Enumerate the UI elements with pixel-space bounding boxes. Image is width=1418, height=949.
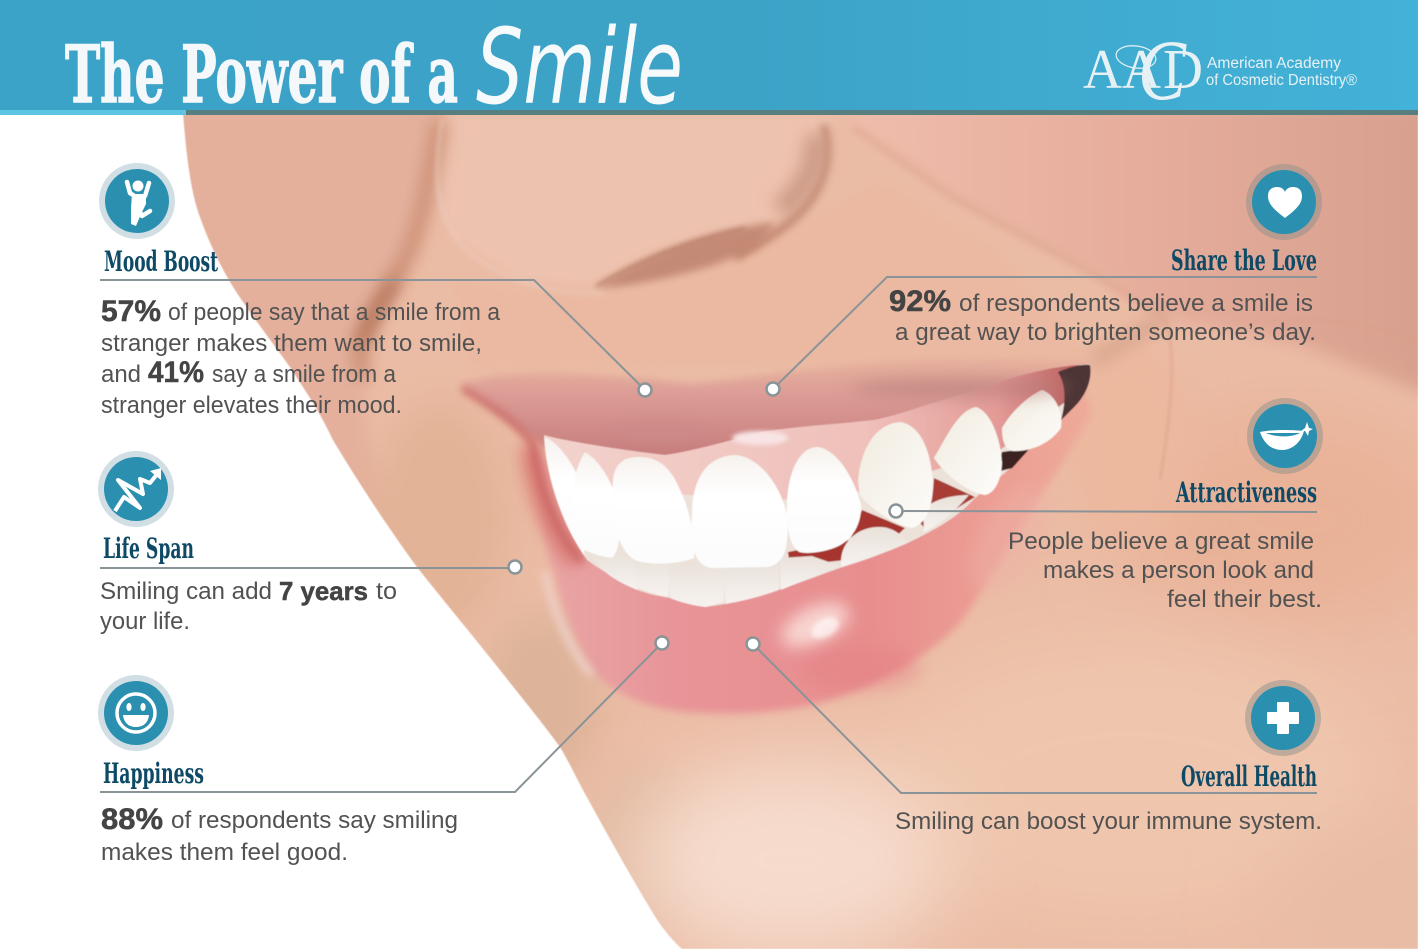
text block: of people say that a smile from a — [168, 299, 501, 326]
logo: AACD: C — [1138, 22, 1187, 118]
text block — [101, 803, 458, 866]
text block: your life. — [100, 608, 190, 635]
text block: stranger elevates their mood. — [101, 392, 402, 419]
text block: a great way to brighten someone’s day. — [895, 319, 1316, 346]
marker dots — [508, 382, 902, 650]
text block: 7 years — [279, 576, 368, 606]
gums — [544, 365, 1080, 500]
text block: of respondents believe a smile is — [959, 290, 1313, 317]
text block: makes a person look and — [1043, 557, 1314, 584]
icon: smiley — [98, 675, 174, 751]
right cheek below fold — [1158, 430, 1418, 614]
title: Smile — [476, 6, 683, 128]
cheek/nose crease — [360, 120, 440, 380]
panel: happiness — [98, 675, 458, 866]
nostril — [596, 222, 775, 288]
fold line — [856, 128, 1142, 304]
panel: mood boost — [99, 163, 501, 419]
photo: smiling face — [150, 100, 1418, 949]
heading: Share the Love — [1171, 244, 1317, 277]
icon: sparkling smile — [1247, 398, 1323, 474]
panel: life span — [98, 451, 397, 635]
logo: AACD — [1083, 22, 1358, 118]
lower teeth — [590, 495, 969, 607]
text block — [101, 295, 501, 419]
philtrum — [450, 180, 1090, 370]
heading: Mood Boost — [104, 245, 218, 278]
dark gaps — [788, 510, 905, 566]
logo: AACD: AA — [1083, 39, 1162, 101]
text block: 57% — [101, 295, 161, 328]
text block — [889, 285, 1316, 346]
text block: say a smile from a — [212, 361, 397, 388]
lower lip — [530, 380, 1092, 714]
panel: attractiveness — [1008, 398, 1323, 613]
logo: AACD: American Academy — [1207, 55, 1341, 72]
right cheek above fold — [999, 115, 1418, 394]
icon: heart — [1246, 164, 1322, 240]
text block: Smiling can boost your immune system. — [895, 808, 1322, 835]
nose wing edge — [437, 120, 605, 293]
text block: of respondents say smiling — [171, 807, 458, 834]
lower lip pale edge — [545, 572, 592, 675]
text block: People believe a great smile — [1008, 528, 1314, 555]
icon: plus — [1245, 680, 1321, 756]
skin — [150, 100, 1418, 949]
left cheek — [183, 115, 433, 494]
upper teeth — [544, 437, 861, 568]
text block: 41% — [148, 356, 204, 389]
dark back of mouth — [1058, 365, 1090, 420]
text block: 88% — [101, 803, 163, 836]
nose — [443, 120, 824, 280]
canine and side teeth — [858, 390, 1061, 528]
heading: Overall Health — [1181, 760, 1317, 793]
nose wing shadow — [735, 125, 827, 258]
mouth interior — [544, 364, 1090, 607]
icon: jumping person — [99, 163, 175, 239]
heading: Happiness — [103, 757, 204, 790]
title: The Power of a — [65, 28, 458, 121]
text block — [1008, 528, 1322, 613]
panel: overall health — [895, 680, 1322, 835]
leader lines — [100, 277, 1317, 793]
text block: makes them feel good. — [101, 839, 348, 866]
logo: AACD: of Cosmetic Dentistry® — [1206, 72, 1358, 89]
text block: and — [101, 361, 141, 388]
heading: Attractiveness — [1175, 476, 1317, 509]
heading: Life Span — [103, 532, 194, 565]
tooth highlights and lip gloss — [610, 378, 1070, 690]
upper lip — [462, 358, 1092, 470]
text block: 92% — [889, 285, 951, 318]
text block — [100, 576, 397, 635]
mouth corner shadow — [462, 388, 582, 562]
icon: rising pulse arrow — [98, 451, 174, 527]
logo: AACD: D — [1163, 39, 1203, 101]
text block: feel their best. — [1167, 586, 1322, 613]
mouth corner shade — [1092, 318, 1165, 362]
text block: to — [376, 578, 397, 605]
panel: share the love — [889, 164, 1322, 346]
text block: stranger makes them want to smile, — [101, 330, 482, 357]
mouth corner glow — [530, 445, 578, 562]
text block: Smiling can add — [100, 578, 272, 605]
header band — [0, 0, 1418, 115]
